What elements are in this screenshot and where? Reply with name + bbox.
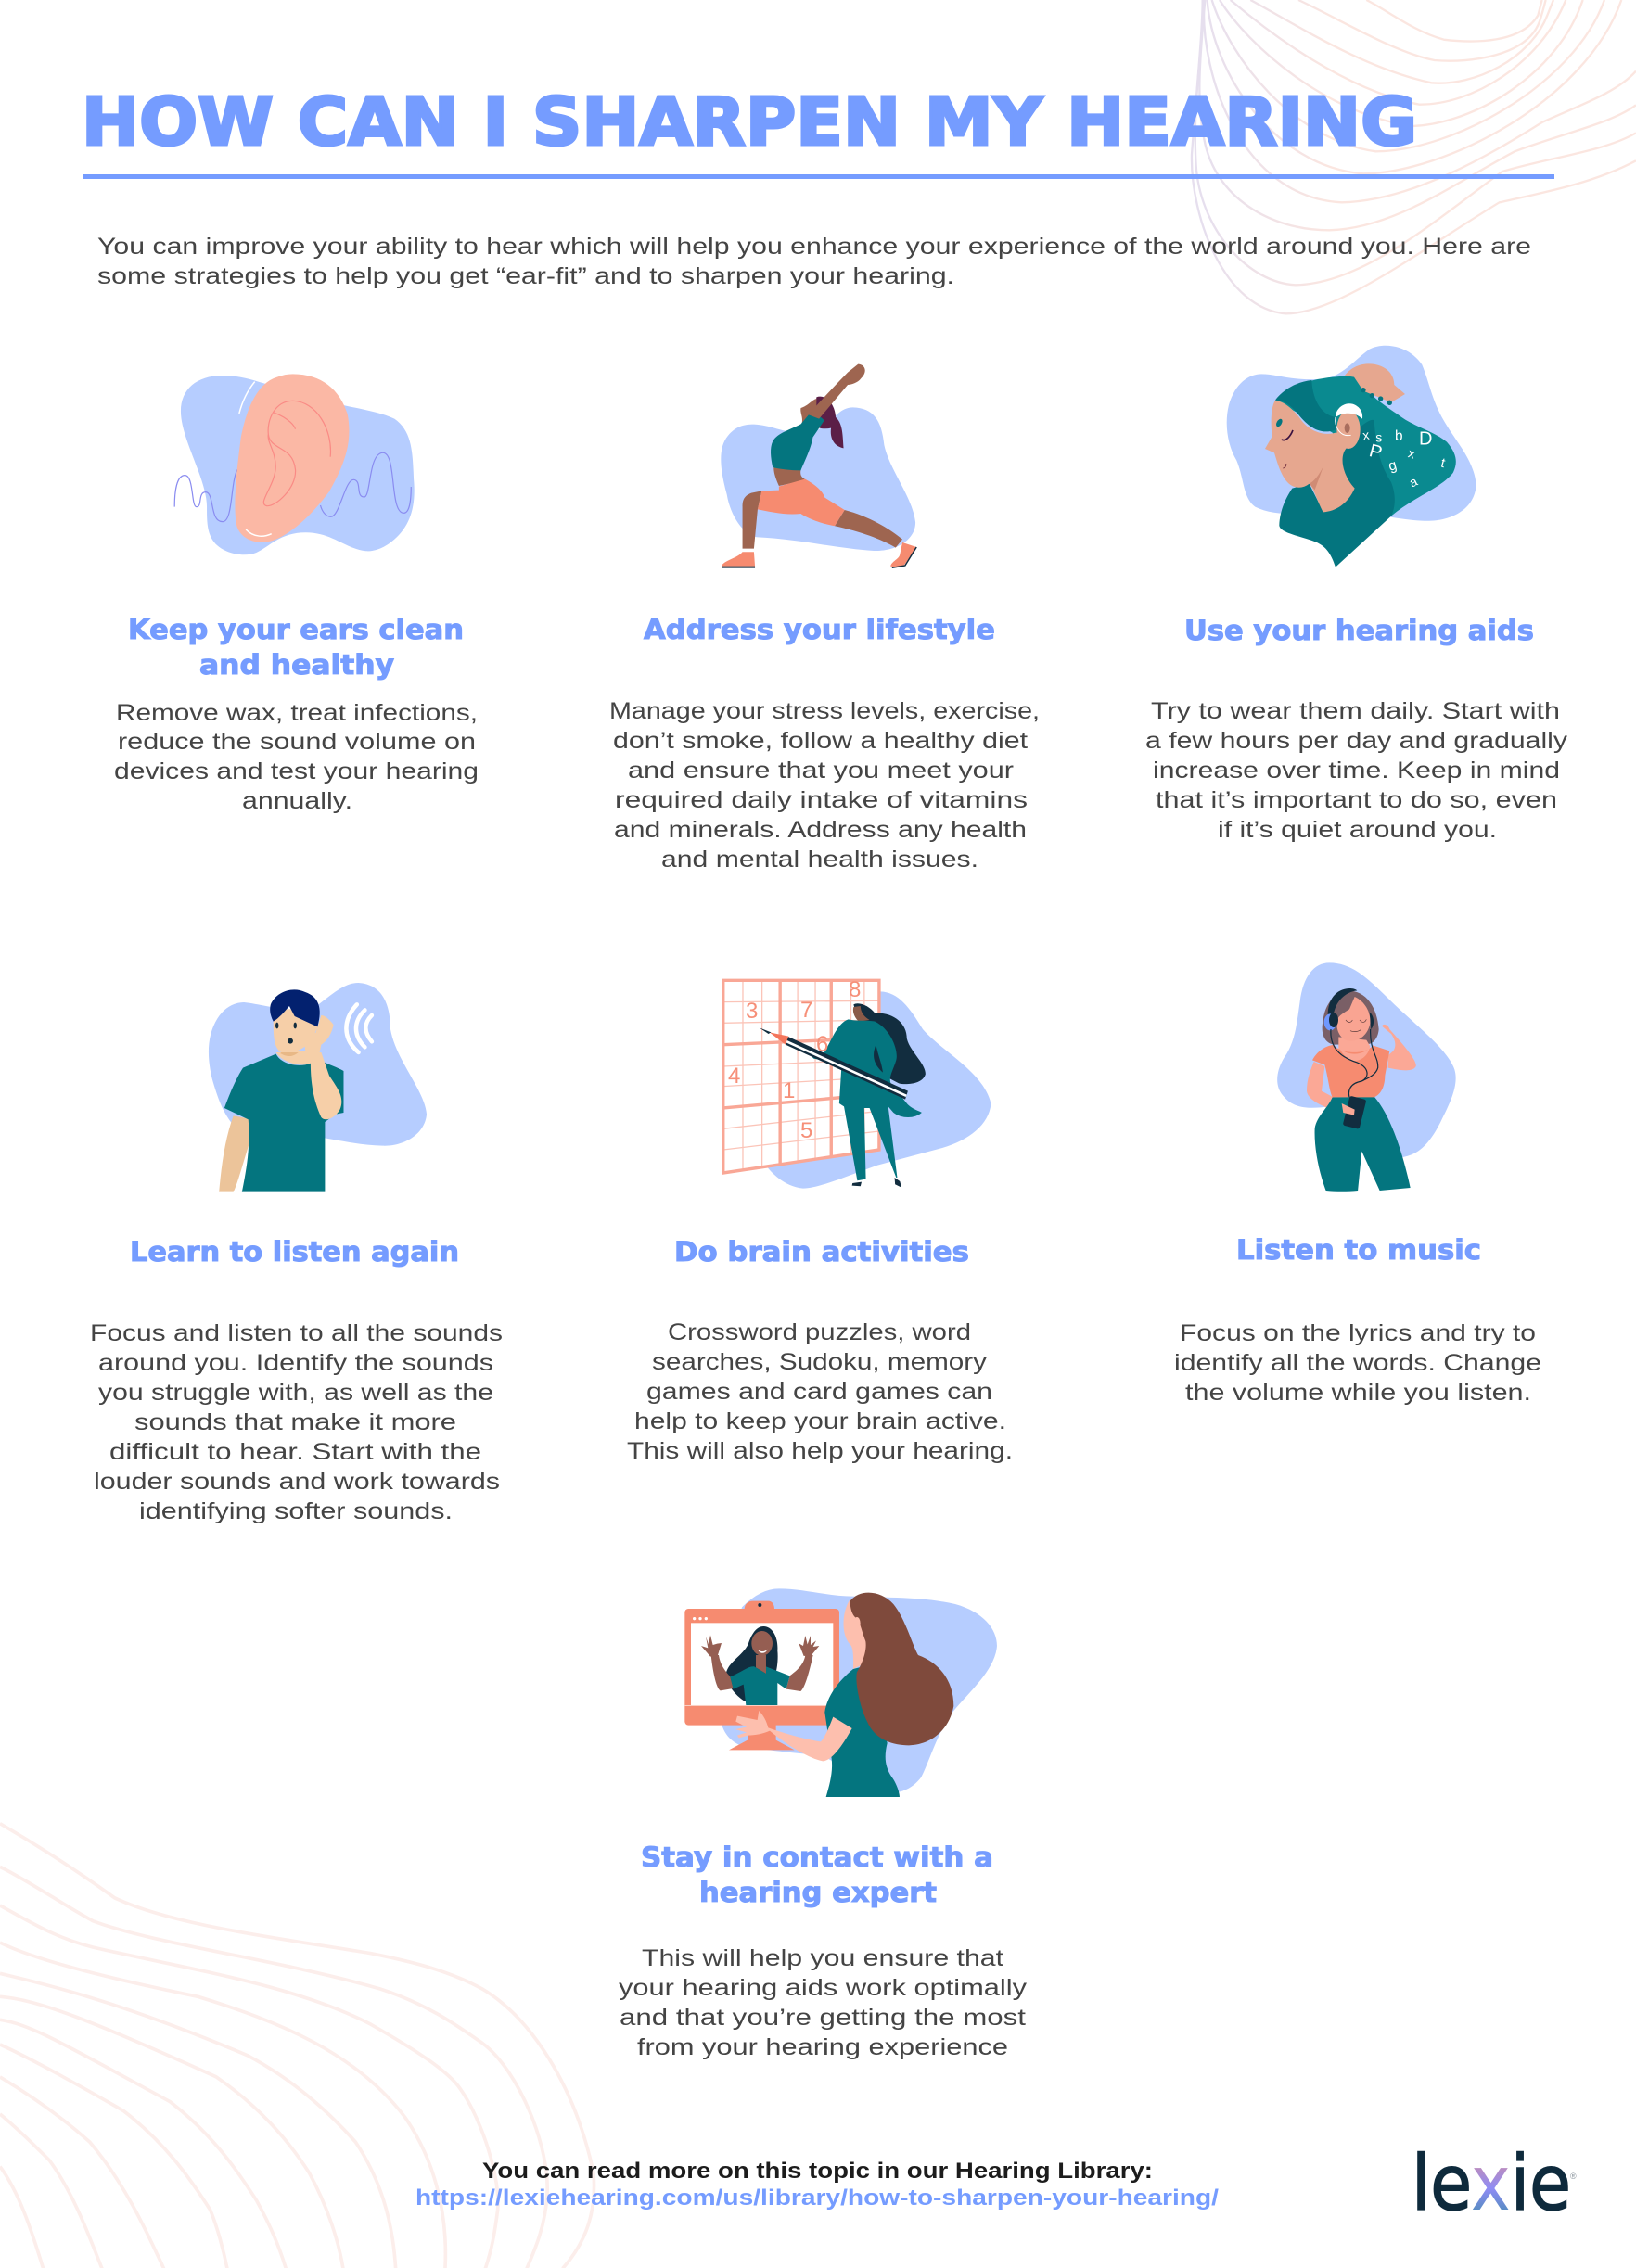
- icon: woman with hearing aid: a: [1407, 474, 1420, 490]
- text: expert: [619, 1945, 1028, 2060]
- text: brain: searches, Sudoku, memory: [652, 1349, 988, 1375]
- icon: woman with hearing aid: x: [1361, 427, 1370, 443]
- text: listen: sounds that make it more: [134, 1409, 456, 1435]
- text: brain: games and card games can: [646, 1379, 992, 1405]
- text: lifestyle: and mental health issues.: [661, 847, 978, 873]
- text: music: Focus on the lyrics and try to: [1180, 1320, 1536, 1346]
- text: listen: you struggle with, as well as the: [98, 1380, 493, 1406]
- text: ears: Remove wax, treat infections,: [116, 700, 478, 726]
- icon: woman with hearing aid: x: [1407, 445, 1417, 462]
- intro paragraph: some strategies to help you get “ear-fit” and to sharpen your hearing.: [97, 263, 954, 289]
- text: hearing aids: Try to wear them daily. Start with: [1151, 698, 1560, 724]
- heading: stay in contact: Stay in contact with a: [641, 1841, 993, 1873]
- text: expert: This will help you ensure that: [642, 1945, 1003, 1971]
- intro paragraph: [97, 234, 1531, 289]
- text: listen: around you. Identify the sounds: [98, 1350, 493, 1376]
- heading: stay in contact: [641, 1841, 993, 1908]
- heading: keep your ears clean: and healthy: [199, 649, 394, 681]
- text: ears: annually.: [242, 788, 352, 814]
- text: lifestyle: Manage your stress levels, exercise,: [609, 698, 1040, 724]
- text: lifestyle: and ensure that you meet your: [628, 758, 1014, 784]
- text: listen: identifying softer sounds.: [139, 1498, 453, 1524]
- panel: do brain activities: [627, 977, 1013, 1464]
- icon: video call on monitor: [684, 1588, 997, 1797]
- heading: do brain activities: Do brain activities: [674, 1236, 969, 1268]
- logo: lexie: lexie: [1412, 2140, 1571, 2228]
- text: ears: devices and test your hearing: [114, 758, 479, 784]
- icon: sudoku board with woman and pencil: 1: [783, 1078, 795, 1103]
- icon: woman with hearing aid: g: [1387, 457, 1399, 475]
- panel: keep your ears clean: [114, 374, 479, 814]
- heading: address your lifestyle: Address your lifestyle: [644, 614, 995, 645]
- panel: stay in contact with a hearing expert: [619, 1588, 1028, 2060]
- icon: woman with hearing aid: b: [1395, 428, 1403, 444]
- panel: learn to listen again: [90, 983, 503, 1524]
- text: listen: Focus and listen to all the sounds: [90, 1320, 503, 1346]
- icon: yoga pose: [721, 364, 916, 568]
- text: music: identify all the words. Change: [1174, 1350, 1541, 1376]
- heading: use your hearing aids: Use your hearing aids: [1184, 615, 1534, 646]
- text: listen: louder sounds and work towards: [94, 1469, 500, 1495]
- text: hearing aids: increase over time. Keep in mind: [1153, 758, 1560, 784]
- text: lifestyle: don’t smoke, follow a healthy diet: [613, 728, 1028, 754]
- text: expert: your hearing aids work optimally: [619, 1975, 1028, 2001]
- text: hearing aids: a few hours per day and gradually: [1145, 728, 1568, 754]
- text: music: [1174, 1320, 1541, 1406]
- text: lifestyle: required daily intake of vitamins: [615, 787, 1028, 813]
- text: ears: reduce the sound volume on: [118, 729, 476, 755]
- heading: listen to music: Listen to music: [1236, 1234, 1481, 1266]
- text: brain: [627, 1319, 1013, 1464]
- background wave lines: bottom left: [0, 1824, 594, 2268]
- icon: sudoku board with woman and pencil: 4: [728, 1064, 740, 1089]
- text: hearing aids: if it’s quiet around you.: [1218, 817, 1497, 843]
- title underline: [83, 174, 1554, 179]
- footer: read more: https://lexiehearing.com/us/library/how-to-sharpen-your-hearing/: [415, 2185, 1219, 2211]
- text: listen: [90, 1320, 503, 1524]
- text: expert: and that you’re getting the most: [620, 2005, 1026, 2031]
- icon: sudoku board with woman and pencil: [723, 977, 991, 1189]
- icon: woman with hearing aid: s: [1375, 430, 1382, 445]
- text: brain: Crossword puzzles, word: [668, 1319, 971, 1345]
- text: lifestyle: and minerals. Address any health: [614, 817, 1027, 843]
- text: listen: difficult to hear. Start with the: [109, 1439, 481, 1465]
- panel: listen to music: [1174, 962, 1541, 1406]
- icon: sudoku board with woman and pencil: 6: [816, 1032, 828, 1057]
- icon: woman with hearing aid: [1227, 346, 1476, 567]
- icon: woman with hearing aid: t: [1439, 456, 1447, 471]
- panel: use your hearing aids: [1145, 346, 1568, 843]
- icon: ear with sound waves: [174, 374, 415, 554]
- icon: sudoku board with woman and pencil: 7: [800, 998, 812, 1023]
- intro paragraph: You can improve your ability to hear which will help you enhance your experience of the world around you. Here are: [97, 234, 1531, 260]
- text: hearing aids: [1145, 698, 1568, 843]
- text: ears: [114, 700, 479, 814]
- footer: read more: You can read more on this topic in our Hearing Library:: [482, 2159, 1153, 2184]
- icon: woman with hearing aid: P: [1367, 440, 1384, 464]
- footer: read more: [415, 2159, 1219, 2211]
- heading: stay in contact: hearing expert: [699, 1877, 937, 1908]
- heading: learn to listen again: Learn to listen again: [130, 1236, 459, 1268]
- background wave lines: top right: [1192, 0, 1636, 313]
- icon: woman with headphones: [1277, 962, 1456, 1192]
- icon: sudoku board with woman and pencil: 3: [746, 999, 758, 1024]
- heading: keep your ears clean: Keep your ears clean: [128, 614, 464, 645]
- panel: address your lifestyle: [609, 364, 1040, 873]
- icon: man cupping ear: [209, 983, 427, 1192]
- text: lifestyle: [609, 698, 1040, 873]
- text: brain: help to keep your brain active.: [634, 1408, 1006, 1434]
- text: hearing aids: that it’s important to do so, even: [1156, 787, 1557, 813]
- heading: keep your ears clean: [128, 614, 464, 681]
- icon: sudoku board with woman and pencil: 8: [849, 977, 861, 1002]
- logo: lexie: ®: [1570, 2172, 1577, 2181]
- icon: sudoku board with woman and pencil: 5: [800, 1118, 812, 1143]
- icon: woman with hearing aid: D: [1419, 428, 1432, 449]
- text: brain: This will also help your hearing.: [627, 1438, 1013, 1464]
- text: expert: from your hearing experience: [637, 2034, 1008, 2060]
- text: music: the volume while you listen.: [1185, 1380, 1531, 1406]
- title: HOW CAN I SHARPEN MY HEARING: [82, 83, 1417, 160]
